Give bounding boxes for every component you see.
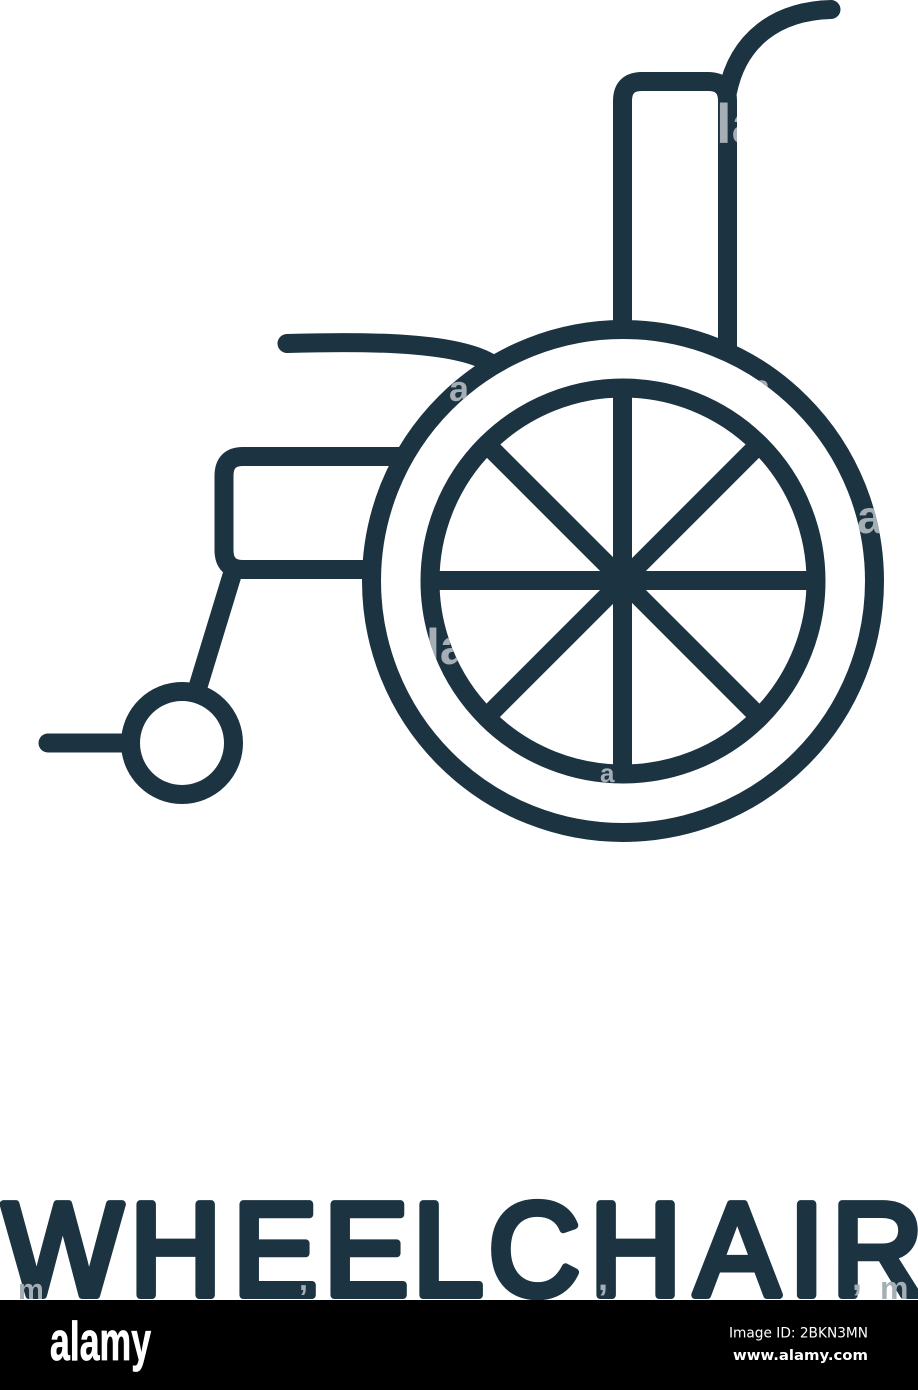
icon: large outer wheel [372,330,874,832]
icon: wheelchair [48,10,874,832]
watermark fragments on icon [426,92,883,788]
watermark fragments on heading: , [852,1257,862,1298]
icon: push handle [728,10,831,92]
icon: wheel spokes [432,390,814,772]
watermark fragments on icon: la [426,619,469,675]
footer logo: alamy: alamy [50,1310,151,1372]
icon: front axle bar [48,734,128,752]
watermark fragments on heading: , [598,1257,608,1298]
footer text: url: www.alamy.com [733,1348,868,1364]
watermark fragments on icon: a [857,491,883,543]
watermark fragments on heading: , [299,1261,308,1297]
watermark fragments on heading: m [18,1274,44,1306]
watermark fragments on icon: la [716,92,764,155]
watermark fragments on icon: a [600,758,615,788]
icon: small caster wheel [130,692,234,794]
icon: inner wheel rim [430,388,816,774]
footer bar [0,1300,918,1390]
footer text: image id: Image ID: 2BKN3MN [729,1326,868,1342]
icon: seat back [622,82,728,348]
watermark fragments on heading: m [880,1270,908,1306]
icon: armrest [287,343,492,364]
icon: footrest frame [224,456,405,570]
watermark fragments on icon: a [449,368,470,409]
icon: front strut [197,572,233,690]
watermark fragments on heading [18,1257,908,1306]
watermark fragments on icon: a [753,370,770,403]
heading: WHEELCHAIR: WHEELCHAIR [3,1177,918,1324]
